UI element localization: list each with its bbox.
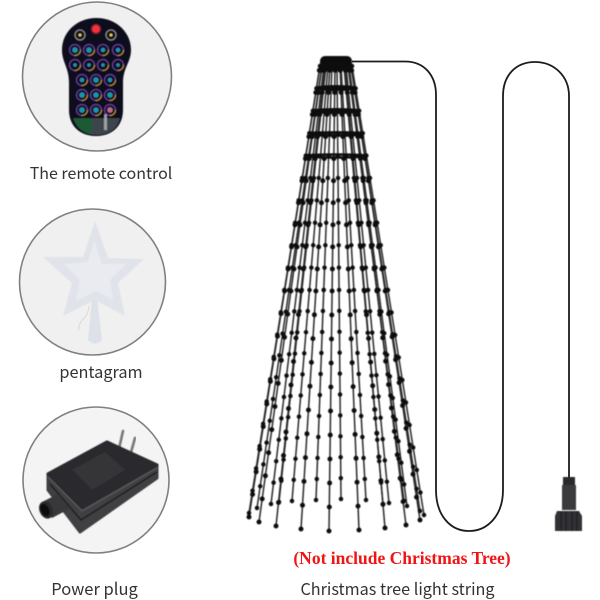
icon: plug barrel connector: [36, 494, 69, 521]
tree top cap: [320, 56, 352, 70]
strands: wires: [249, 66, 424, 531]
icon: remote buttons: [70, 24, 124, 116]
icon: star highlights: [64, 240, 126, 301]
icon: remote photo strip: [73, 114, 120, 135]
icon: remote control body: [62, 18, 131, 136]
icon: star topper: [43, 221, 144, 316]
panel: remote control: [22, 2, 172, 151]
icon: star stem: [88, 298, 102, 344]
panel: power plug: [23, 407, 169, 553]
icon: star wire: [79, 306, 89, 330]
cable end connector: [555, 477, 582, 531]
christmas tree light string: [249, 56, 424, 531]
power cable: [352, 62, 569, 531]
label: remote control: The remote control: [30, 160, 172, 184]
icon: plug prongs: [118, 431, 135, 463]
strands: front beads: [249, 66, 420, 531]
label: power plug: Power plug: [51, 576, 138, 600]
label: pentagram: pentagram: [59, 359, 143, 383]
label: christmas tree light string: Christmas tree light string: [300, 576, 495, 600]
strands: back beads: [249, 66, 424, 515]
note: not include christmas tree: (Not include Christmas Tree): [293, 548, 511, 568]
tree rings: [305, 86, 367, 158]
panel: pentagram: [20, 209, 166, 355]
icon: plug adapter body: [48, 442, 157, 532]
